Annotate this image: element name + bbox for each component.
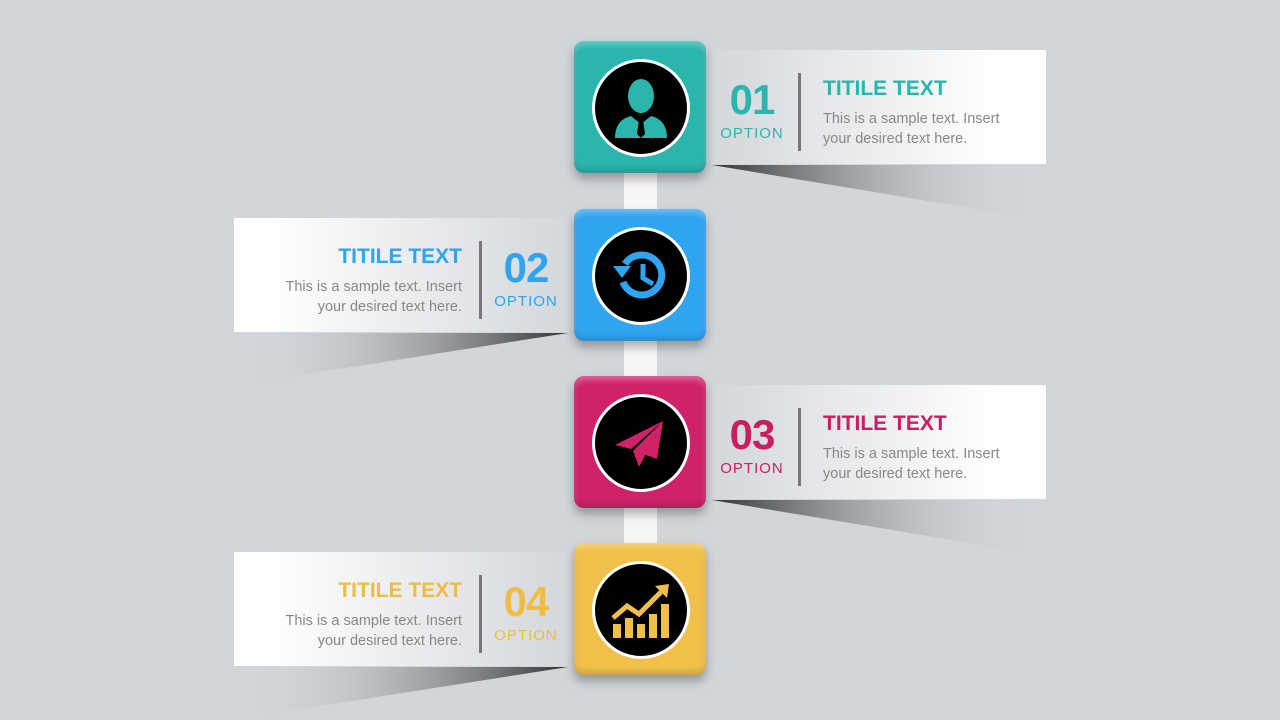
panel: option 04: This is a sample text. Insert [286, 613, 462, 629]
icon box: growth chart [574, 543, 706, 675]
panel: option 02 [234, 218, 568, 332]
panel: option 02: TITILE TEXT [338, 245, 462, 268]
panel: option 04: OPTION [494, 627, 558, 644]
panel: option 02: your desired text here. [318, 299, 462, 315]
panel: option 03: your desired text here. [823, 466, 967, 482]
panel: option 03: 03 [730, 411, 774, 458]
panel: option 03: OPTION [720, 460, 784, 477]
panel: option 01: your desired text here. [823, 131, 967, 147]
panel: option 04: 04 [504, 578, 548, 625]
panel: option 02: 02 [504, 244, 548, 291]
panel: option 04: your desired text here. [318, 633, 462, 649]
panel: option 03: TITILE TEXT [823, 412, 947, 435]
panel: option 04 [234, 552, 568, 666]
connector bar [624, 160, 657, 560]
panel: option 01: This is a sample text. Insert [823, 111, 999, 127]
panel: option 04: TITILE TEXT [338, 579, 462, 602]
icon box: history [574, 209, 706, 341]
panel: option 03: This is a sample text. Insert [823, 446, 999, 462]
panel: option 01 [712, 50, 1046, 164]
panel: option 01: 01 [730, 76, 774, 123]
panel: option 02: OPTION [494, 293, 558, 310]
panel: option 01: OPTION [720, 125, 784, 142]
icon box: paper plane [574, 376, 706, 508]
panel: option 03 [712, 385, 1046, 499]
panel: option 02: This is a sample text. Insert [286, 279, 462, 295]
panel: option 01: TITILE TEXT [823, 77, 947, 100]
icon box: person [574, 41, 706, 173]
